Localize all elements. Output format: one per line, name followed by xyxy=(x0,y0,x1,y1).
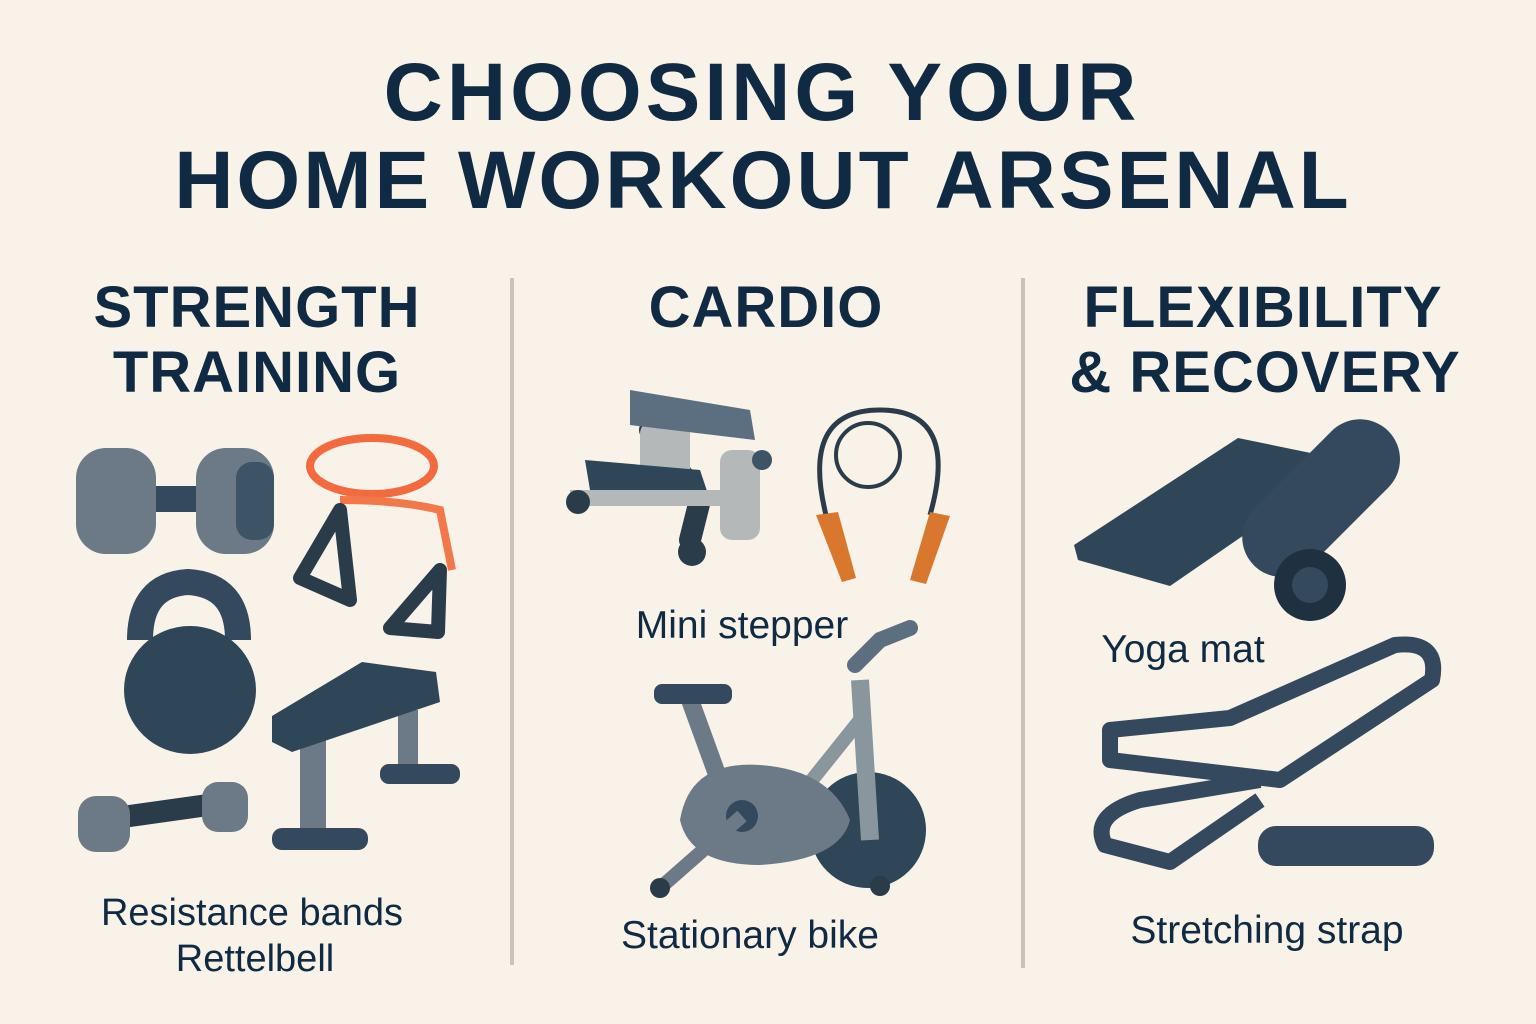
title: CHOOSING YOUR xyxy=(384,47,1140,138)
label: resistance bands / rettelbell: Resistance bands xyxy=(101,892,403,934)
heading: strength training xyxy=(94,275,420,405)
heading: flexibility & recovery xyxy=(1069,275,1461,405)
label: yoga mat: Yoga mat xyxy=(1101,628,1265,671)
icon: resistance band xyxy=(300,438,452,632)
icon: stretching strap xyxy=(1102,644,1434,866)
label: stationary bike: Stationary bike xyxy=(621,914,879,957)
title: HOME WORKOUT ARSENAL xyxy=(174,135,1352,226)
icon: mini stepper xyxy=(566,390,772,566)
heading: cardio: CARDIO xyxy=(649,275,883,340)
heading: strength training: TRAINING xyxy=(113,340,401,405)
label: resistance bands / rettelbell xyxy=(101,892,403,980)
icon: kettlebell xyxy=(124,582,256,754)
label: mini stepper: Mini stepper xyxy=(636,604,848,647)
icon: yoga mat xyxy=(1074,403,1417,621)
icon: dumbbell xyxy=(76,448,274,554)
icon: small dumbbell xyxy=(78,782,248,852)
icon: bench xyxy=(272,662,460,850)
heading: strength training: STRENGTH xyxy=(94,275,420,340)
heading: flexibility & recovery: & RECOVERY xyxy=(1069,340,1461,405)
icon: stationary bike xyxy=(650,628,926,898)
label: resistance bands / rettelbell: Rettelbell xyxy=(176,938,334,980)
label: stretching strap: Stretching strap xyxy=(1130,909,1404,952)
heading: flexibility & recovery: FLEXIBILITY xyxy=(1084,275,1442,340)
title xyxy=(174,47,1352,226)
icon: jump rope xyxy=(816,410,950,584)
